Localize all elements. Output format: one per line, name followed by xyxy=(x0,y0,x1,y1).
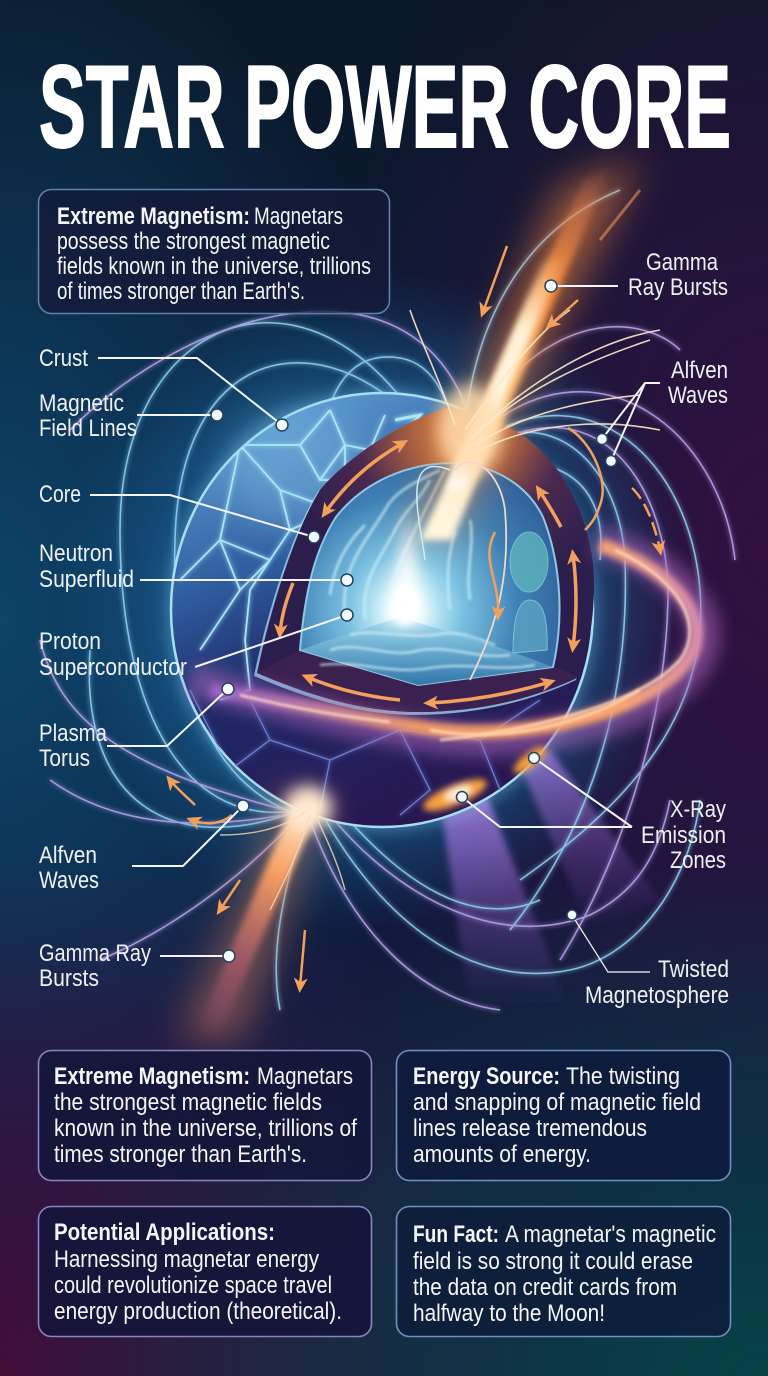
label: gamma ray bursts left xyxy=(39,940,235,992)
callout: extreme magnetism top: Extreme Magnetism: xyxy=(57,203,250,230)
card: extreme magnetism: the strongest magnetic fields xyxy=(54,1089,322,1116)
cutaway shell xyxy=(254,408,594,715)
magnetic field lines behind xyxy=(40,190,735,1010)
label: x-ray emission zones xyxy=(456,752,726,874)
label: neutron superfluid: Neutron xyxy=(39,540,113,567)
x-ray emission hot spots xyxy=(420,742,550,817)
label: alfven waves right xyxy=(596,357,728,466)
card: potential applications: Potential Applications: xyxy=(54,1219,275,1246)
label: magnetic field lines xyxy=(39,390,223,442)
card: fun fact: A magnetar's magnetic xyxy=(505,1221,716,1248)
label: gamma ray bursts left: Gamma Ray xyxy=(39,940,151,967)
card: potential applications: energy production (theoretical). xyxy=(54,1298,342,1325)
label: proton superconductor xyxy=(39,609,353,681)
lower gamma beam xyxy=(180,786,345,1040)
label: alfven waves left xyxy=(39,800,249,894)
label: proton superconductor: Proton xyxy=(39,628,101,655)
label: crust: Crust xyxy=(39,345,88,372)
card: extreme magnetism xyxy=(38,1050,372,1180)
card: energy source: Energy Source: xyxy=(413,1063,560,1090)
label: alfven waves left: Alfven xyxy=(39,842,97,869)
label: plasma torus: Torus xyxy=(39,745,90,772)
label: plasma torus xyxy=(39,683,234,772)
core floor waves xyxy=(320,633,535,670)
card: energy source xyxy=(396,1050,730,1180)
label: core xyxy=(39,481,320,543)
label: x-ray emission zones: Emission xyxy=(641,822,726,849)
card: fun fact: field is so strong it could erase xyxy=(413,1248,693,1275)
purple x-ray beams xyxy=(440,750,660,1010)
card: potential applications: could revolutionize space travel xyxy=(54,1272,332,1299)
card: potential applications: Harnessing magnetar energy xyxy=(54,1246,319,1273)
inner core xyxy=(300,463,560,685)
label: gamma ray bursts right: Ray Bursts xyxy=(628,274,728,301)
label: twisted magnetosphere xyxy=(567,910,729,1009)
callout: extreme magnetism top: of times stronger than Earth's. xyxy=(57,278,305,305)
label: alfven waves left: Waves xyxy=(39,867,99,894)
core plasma strands xyxy=(330,470,471,620)
label: core: Core xyxy=(39,481,81,508)
card: fun fact: halfway to the Moon! xyxy=(413,1300,605,1327)
callout: extreme magnetism top: possess the strongest magnetic xyxy=(57,228,330,255)
card: extreme magnetism: times stronger than Earth's. xyxy=(54,1141,307,1168)
label: magnetic field lines: Field Lines xyxy=(39,415,137,442)
callout: extreme magnetism top: Magnetars xyxy=(254,203,343,230)
label: gamma ray bursts right: Gamma xyxy=(646,249,719,276)
label: alfven waves right: Alfven xyxy=(671,357,728,384)
card: extreme magnetism: Extreme Magnetism: xyxy=(54,1063,250,1090)
label: crust xyxy=(39,345,288,431)
label: twisted magnetosphere: Magnetosphere xyxy=(585,982,729,1009)
label: proton superconductor: Superconductor xyxy=(39,654,187,681)
upper gamma beam xyxy=(410,160,660,680)
card: fun fact: the data on credit cards from xyxy=(413,1274,677,1301)
label: x-ray emission zones: Zones xyxy=(670,847,726,874)
crust cracks xyxy=(180,410,540,815)
card: energy source: and snapping of magnetic field xyxy=(413,1089,701,1116)
card: potential applications xyxy=(38,1206,372,1336)
cells xyxy=(510,532,548,592)
card: energy source: lines release tremendous xyxy=(413,1115,647,1142)
label: x-ray emission zones: X-Ray xyxy=(670,796,726,823)
card: fun fact xyxy=(396,1206,730,1336)
card: fun fact: Fun Fact: xyxy=(413,1221,499,1248)
card: energy source: amounts of energy. xyxy=(413,1141,591,1168)
card: extreme magnetism: Magnetars xyxy=(257,1063,353,1090)
label: twisted magnetosphere: Twisted xyxy=(658,956,729,983)
callout: extreme magnetism top xyxy=(38,190,390,314)
card: extreme magnetism: known in the universe, trillions of xyxy=(54,1115,357,1142)
label: plasma torus: Plasma xyxy=(39,720,108,747)
label: neutron superfluid: Superfluid xyxy=(39,566,134,593)
orange flow arrows xyxy=(170,246,660,987)
callout: extreme magnetism top: fields known in the universe, trillions xyxy=(57,253,371,280)
neutron star sphere xyxy=(168,390,596,830)
label: alfven waves right: Waves xyxy=(668,382,728,409)
label: magnetic field lines: Magnetic xyxy=(39,390,124,417)
label: neutron superfluid xyxy=(39,540,353,593)
card: energy source: The twisting xyxy=(566,1063,680,1090)
label: gamma ray bursts right xyxy=(545,249,728,301)
plasma torus xyxy=(190,540,704,741)
label: gamma ray bursts left: Bursts xyxy=(39,965,99,992)
